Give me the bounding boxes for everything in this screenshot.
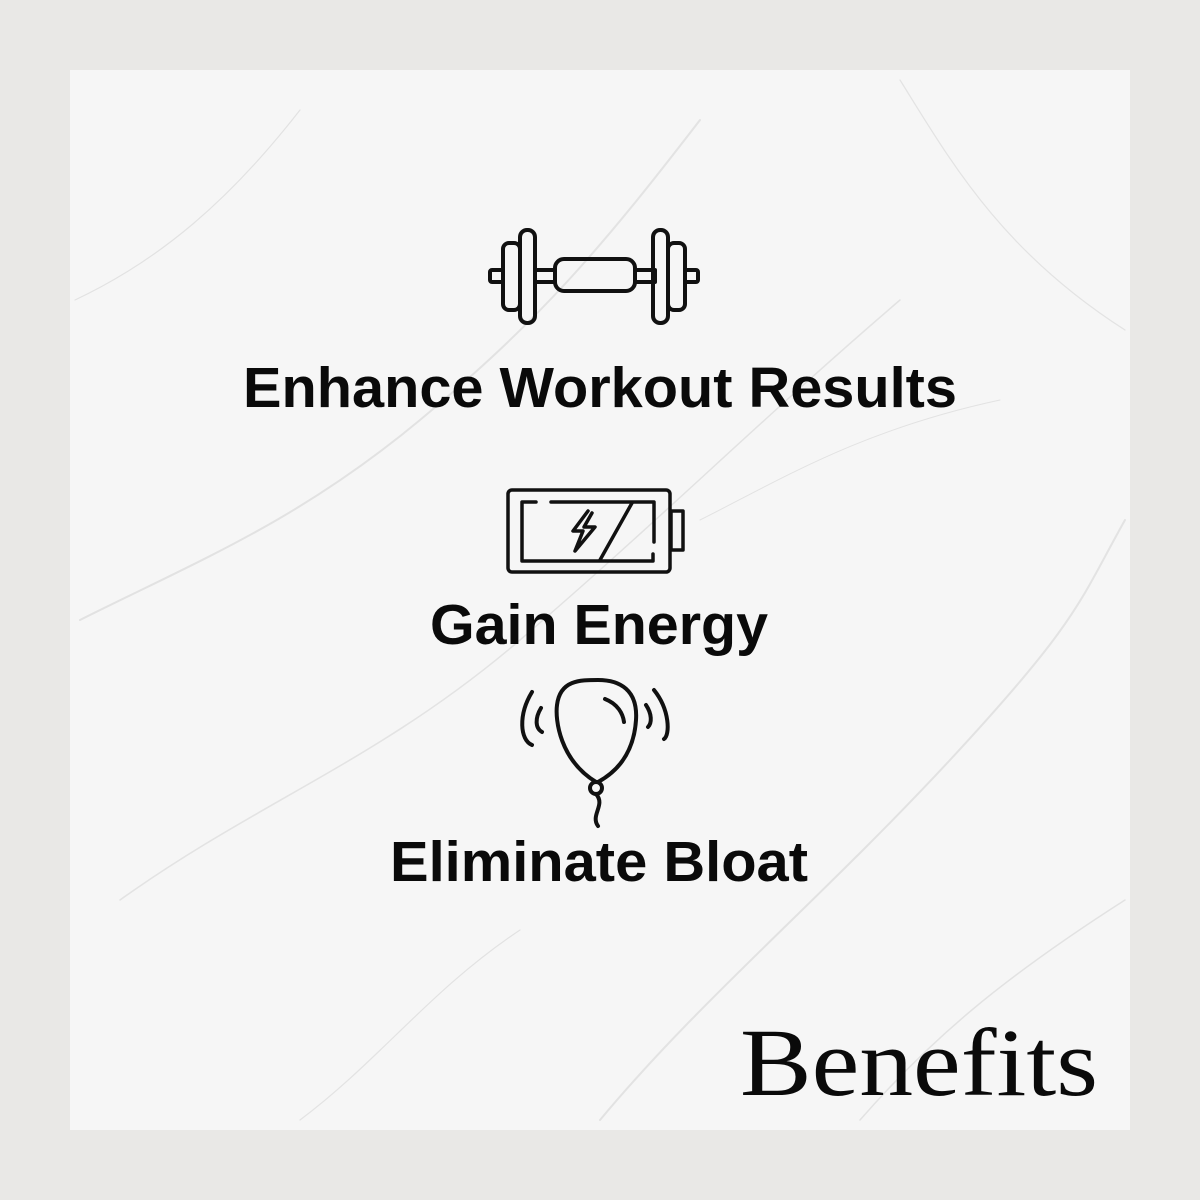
icon: balloon: [522, 680, 668, 826]
heading: Gain Energy: Gain Energy: [430, 593, 768, 657]
heading: Eliminate Bloat: Eliminate Bloat: [390, 830, 808, 894]
heading: Enhance Workout Results: Enhance Workout Results: [243, 356, 957, 420]
title: Benefits: Benefits: [740, 1009, 1098, 1116]
icon: dumbbell: [490, 230, 698, 323]
icon: battery: [508, 490, 683, 572]
